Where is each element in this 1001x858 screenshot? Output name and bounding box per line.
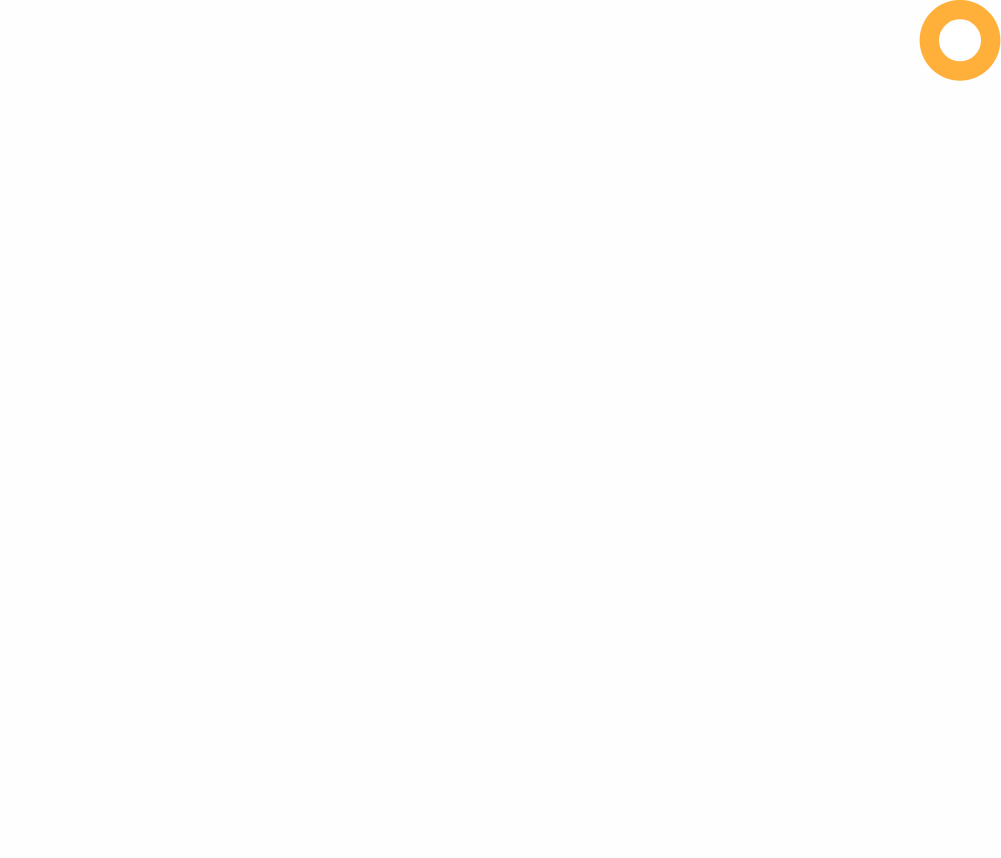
icon: orange ring xyxy=(929,10,991,71)
